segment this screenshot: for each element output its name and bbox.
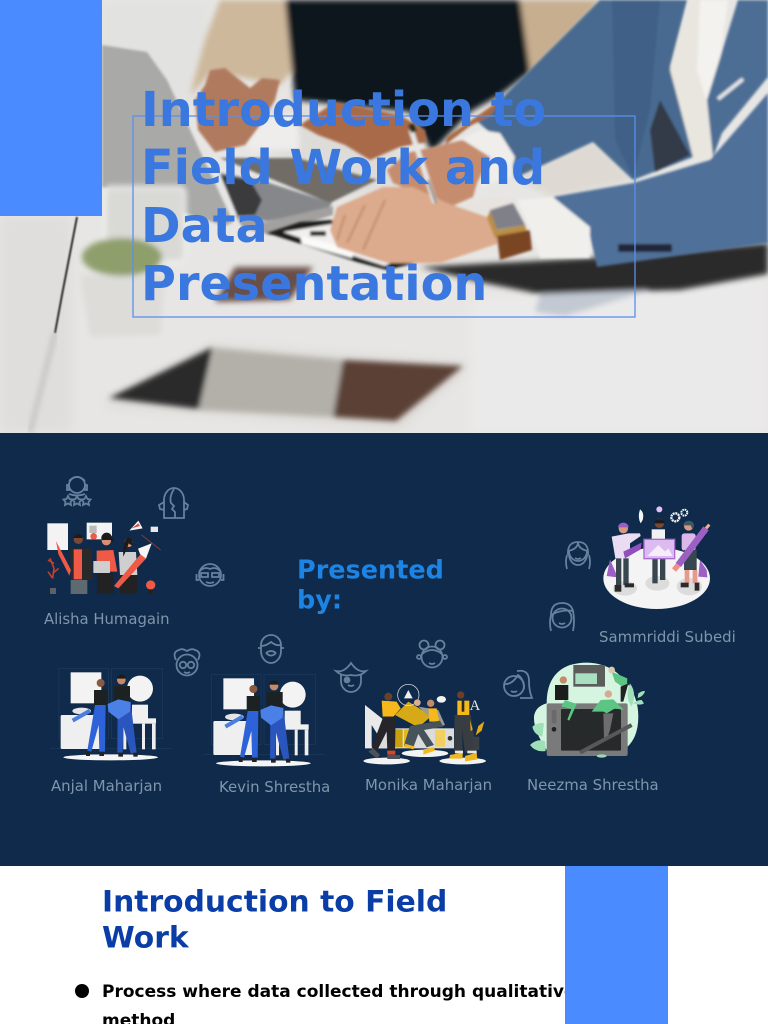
heading: introduction to field work: Introduction to Field <box>102 884 447 920</box>
illustration: Anjal duo with shield <box>50 668 172 760</box>
bullet marker <box>75 984 89 998</box>
panel: presenters <box>0 433 768 866</box>
icon: glasses headset avatar <box>196 564 224 586</box>
icon: pirate avatar <box>336 663 366 692</box>
icon: braids avatar <box>566 542 590 569</box>
illustration: Monika designers with yellow swatches <box>363 684 486 764</box>
blue corner block <box>0 0 102 216</box>
glass and plant <box>80 187 313 337</box>
label: Sammriddi Subedi: Sammriddi Subedi <box>599 628 736 646</box>
label: Anjal Maharjan: Anjal Maharjan <box>51 777 162 795</box>
heading: introduction to field work: Work <box>102 920 190 956</box>
clipboard <box>267 220 420 270</box>
title: Data <box>141 199 268 254</box>
front hands <box>387 140 490 207</box>
illustration: Alisha team with rocket and pencil <box>47 521 161 594</box>
label: Monika Maharjan: Monika Maharjan <box>365 776 492 794</box>
sleeve and jacket body <box>478 0 693 180</box>
icon: bearded man avatar <box>258 635 284 663</box>
icon: woman profile avatar <box>159 488 188 518</box>
blue column block <box>565 866 668 1024</box>
laptop <box>102 45 377 235</box>
lapel <box>707 0 768 157</box>
illustration: Kevin duo with shield <box>203 674 324 766</box>
label: Alisha Humagain: Alisha Humagain <box>44 610 170 628</box>
illustration: Neezma with drawing tablet <box>530 663 645 758</box>
bullet text: Process where data collected through qualitative <box>102 982 576 1002</box>
cuffs <box>517 197 590 258</box>
label: Kevin Shrestha: Kevin Shrestha <box>219 778 330 796</box>
title: Introduction to <box>141 83 546 138</box>
heading: introduction to field work <box>102 884 447 956</box>
heading: presented by: Presented <box>297 556 444 586</box>
icon: headset avatar with stars <box>64 477 90 505</box>
icon: ponytail avatar <box>504 671 532 698</box>
back hands <box>195 68 280 152</box>
heading: presented by <box>297 556 444 616</box>
pen <box>411 130 435 203</box>
icon: headband braids avatar <box>550 603 574 631</box>
title <box>141 83 546 312</box>
panel: next slide <box>0 866 768 1024</box>
title: Presentation <box>141 257 487 312</box>
illustration: Monika designers with yellow swatches: A <box>470 698 481 714</box>
watch <box>490 203 525 230</box>
shirt <box>668 5 714 160</box>
foreground tablet <box>118 356 450 426</box>
label: Neezma Shrestha: Neezma Shrestha <box>527 776 659 794</box>
icon: grandparent glasses avatar <box>175 649 199 676</box>
title frame <box>133 116 635 317</box>
title: Field Work and <box>141 141 545 196</box>
panel: cover photo <box>0 0 768 433</box>
table edge <box>55 217 77 333</box>
dark folder and reflection <box>420 243 768 316</box>
bullet text <box>102 982 576 1024</box>
heading: presented by: by: <box>297 586 342 616</box>
pocket square <box>718 79 743 99</box>
icon: pigtails avatar <box>417 640 447 668</box>
illustration: Sammriddi team on white disc <box>603 506 710 609</box>
lower arm <box>553 93 768 267</box>
